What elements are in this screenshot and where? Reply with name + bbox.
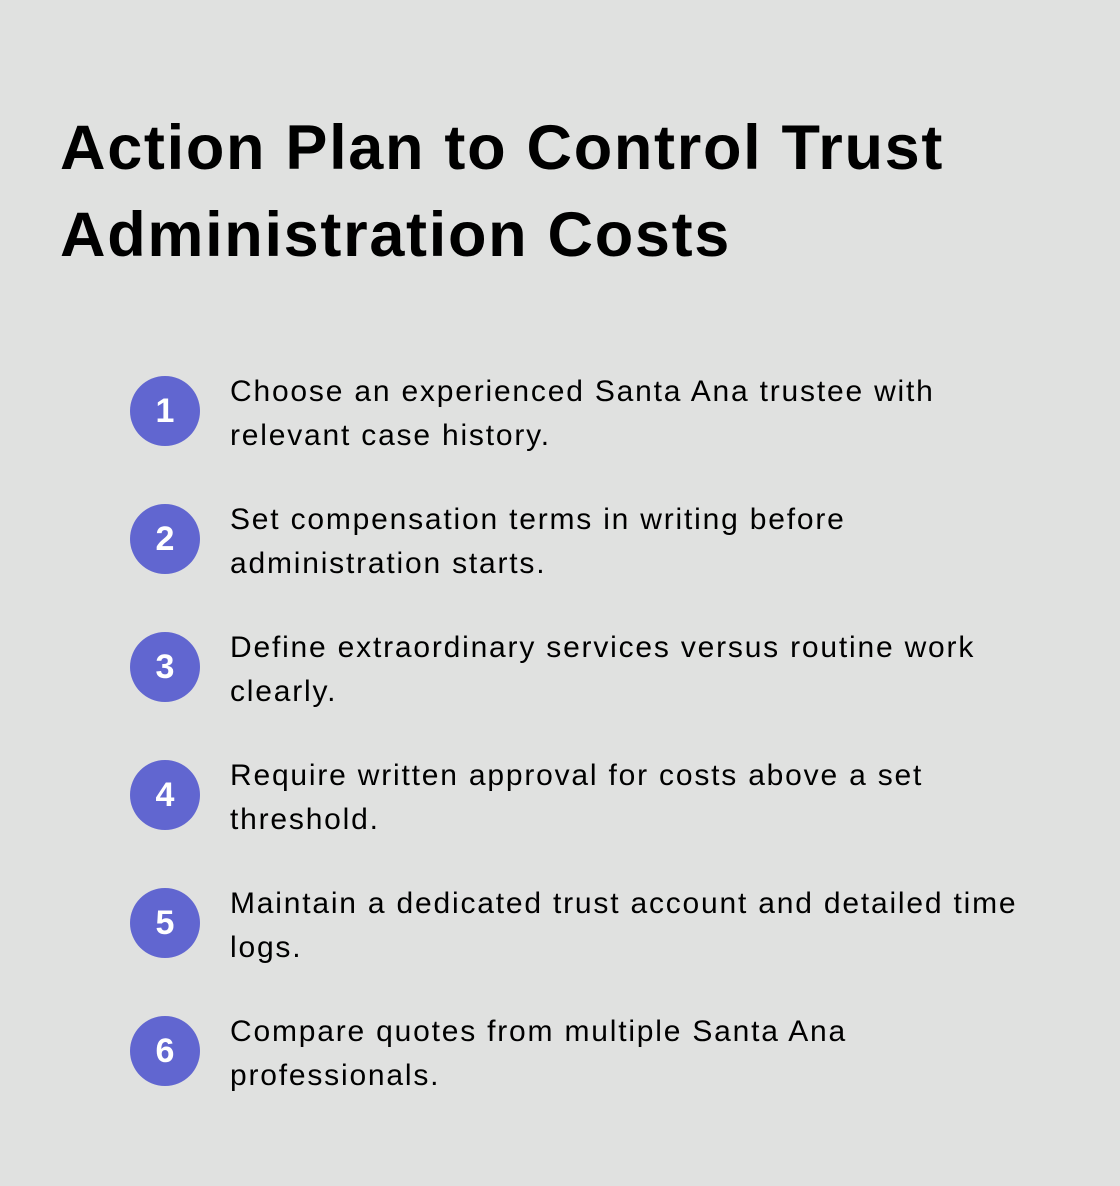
icon: number 2 bbox=[130, 504, 200, 574]
text 6: Compare quotes from multiple Santa Ana bbox=[230, 1015, 847, 1048]
icon: number 6: 6 bbox=[156, 1032, 174, 1070]
icon: number 4 bbox=[130, 760, 200, 830]
text 6 bbox=[230, 1015, 847, 1092]
text 5: logs. bbox=[230, 931, 302, 964]
text 6: professionals. bbox=[230, 1059, 440, 1092]
icon: number 3: 3 bbox=[156, 648, 174, 686]
icon: number 4: 4 bbox=[156, 776, 174, 814]
title: Action Plan to Control Trust bbox=[60, 113, 944, 183]
text 1 bbox=[230, 375, 935, 452]
item 1 bbox=[130, 375, 935, 452]
text 4 bbox=[230, 759, 923, 836]
item 5 bbox=[130, 887, 1017, 964]
item 4 bbox=[130, 759, 923, 836]
text 4: threshold. bbox=[230, 803, 380, 836]
text 5 bbox=[230, 887, 1017, 964]
icon: number 3 bbox=[130, 632, 200, 702]
icon: number 2: 2 bbox=[156, 520, 174, 558]
text 3: clearly. bbox=[230, 675, 337, 708]
text 2: Set compensation terms in writing before bbox=[230, 503, 846, 536]
item 6 bbox=[130, 1015, 847, 1092]
text 5: Maintain a dedicated trust account and detailed time bbox=[230, 887, 1017, 920]
item 3 bbox=[130, 631, 975, 708]
title: Administration Costs bbox=[60, 200, 731, 270]
text 1: relevant case history. bbox=[230, 419, 551, 452]
icon: number 5 bbox=[130, 888, 200, 958]
text 3: Define extraordinary services versus routine work bbox=[230, 631, 975, 664]
icon: number 6 bbox=[130, 1016, 200, 1086]
item 2 bbox=[130, 503, 846, 580]
icon: number 5: 5 bbox=[156, 904, 174, 942]
text 4: Require written approval for costs above a set bbox=[230, 759, 923, 792]
text 1: Choose an experienced Santa Ana trustee with bbox=[230, 375, 935, 408]
text 2: administration starts. bbox=[230, 547, 546, 580]
icon: number 1 bbox=[130, 376, 200, 446]
text 3 bbox=[230, 631, 975, 708]
title bbox=[60, 113, 944, 270]
text 2 bbox=[230, 503, 846, 580]
icon: number 1: 1 bbox=[156, 392, 174, 430]
